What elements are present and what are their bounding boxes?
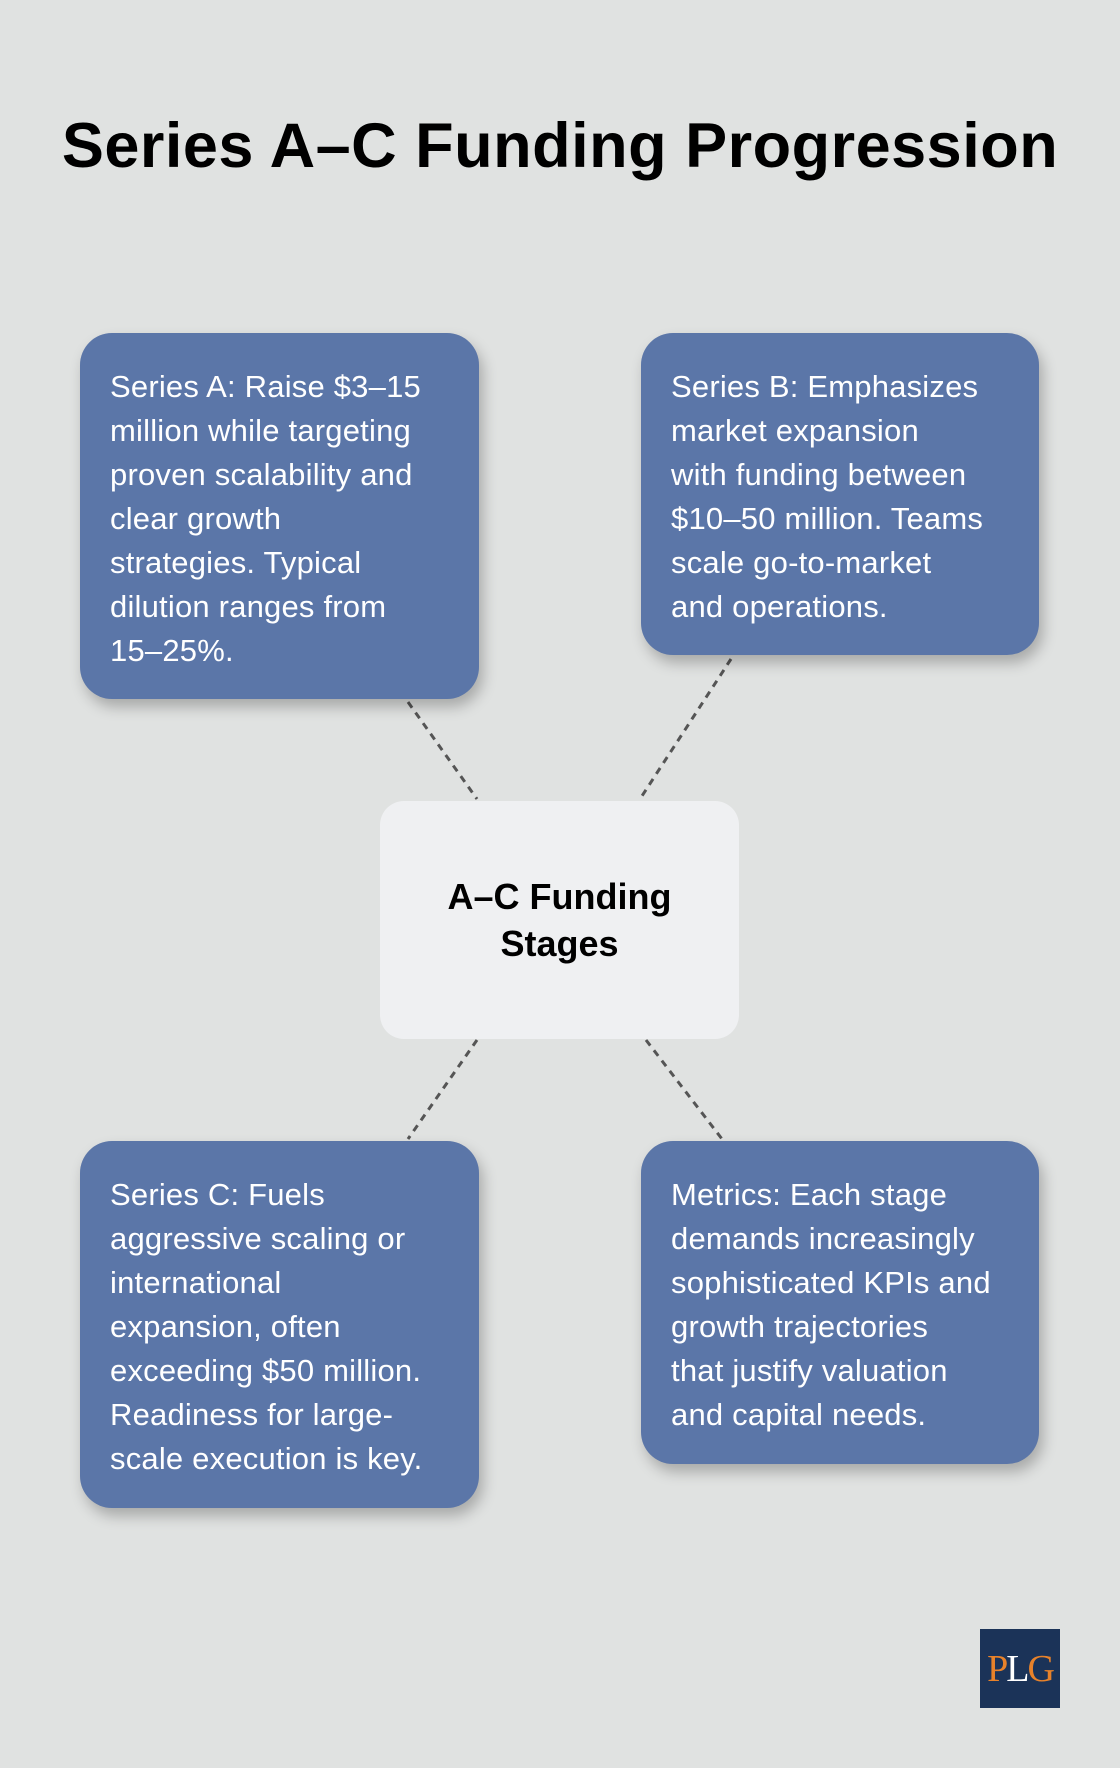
panel: metrics: sophisticated KPIs and xyxy=(671,1265,991,1300)
logo: G xyxy=(1027,1648,1053,1690)
panel: metrics: that justify valuation xyxy=(671,1353,948,1388)
panel: center: Stages xyxy=(500,923,619,964)
panel: series C xyxy=(80,1141,479,1508)
panel: series B xyxy=(641,333,1039,655)
panel: series C: Series C: Fuels xyxy=(110,1177,325,1212)
panel: series C: international xyxy=(110,1265,282,1300)
panel: series A: Series A: Raise $3–15 xyxy=(110,369,421,404)
panel: series B: $10–50 million. Teams xyxy=(671,501,983,536)
panel: metrics: Metrics: Each stage xyxy=(671,1177,947,1212)
panel: series B: and operations. xyxy=(671,589,888,624)
panel: series C: Readiness for large- xyxy=(110,1397,393,1432)
logo: P xyxy=(987,1648,1006,1690)
panel: metrics: growth trajectories xyxy=(671,1309,928,1344)
panel: series A: million while targeting xyxy=(110,413,411,448)
panel: metrics xyxy=(641,1141,1039,1464)
logo: L xyxy=(1006,1648,1027,1690)
panel: series C: scale execution is key. xyxy=(110,1441,422,1476)
panel: series A: strategies. Typical xyxy=(110,545,361,580)
panel: series B: with funding between xyxy=(671,457,966,492)
panel: series A: clear growth xyxy=(110,501,281,536)
panel: center: A–C Funding xyxy=(448,876,671,917)
panel: series C: exceeding $50 million. xyxy=(110,1353,421,1388)
panel: series A xyxy=(80,333,479,699)
panel: center xyxy=(380,801,739,1039)
panel: series B: market expansion xyxy=(671,413,919,448)
title: Series A–C Funding Progression xyxy=(62,111,1058,181)
panel: series B: scale go-to-market xyxy=(671,545,931,580)
panel: series A: 15–25%. xyxy=(110,633,234,668)
panel: series A: proven scalability and xyxy=(110,457,413,492)
panel: series C: expansion, often xyxy=(110,1309,341,1344)
panel: series B: Series B: Emphasizes xyxy=(671,369,978,404)
panel: metrics: and capital needs. xyxy=(671,1397,926,1432)
panel: series C: aggressive scaling or xyxy=(110,1221,405,1256)
logo xyxy=(980,1629,1060,1708)
panel: series A: dilution ranges from xyxy=(110,589,386,624)
panel: metrics: demands increasingly xyxy=(671,1221,975,1256)
